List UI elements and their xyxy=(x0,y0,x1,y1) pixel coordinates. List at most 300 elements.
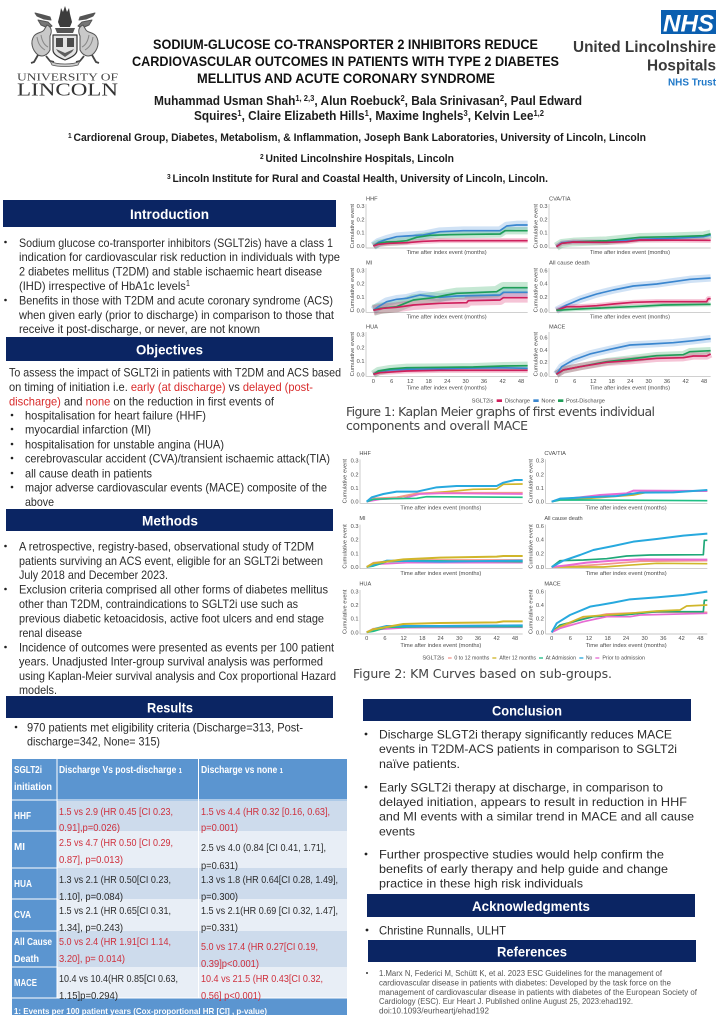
wordmark line 2: LINCOLN xyxy=(17,80,118,100)
text: methods bullets: using Kaplan-Meier survival analysis and Cox proportional Hazard xyxy=(19,669,336,683)
text: objectives: above xyxy=(25,495,54,509)
text: methods bullets: Exclusion criteria comprised all other forms of diabetes mellitus xyxy=(19,582,328,596)
chart: MACE: 0 xyxy=(555,379,558,385)
row: MI: 0.87], p=0.013) xyxy=(59,855,123,866)
helmet and tower xyxy=(58,6,72,27)
text: objectives: myocardial infarction (MI) xyxy=(25,422,151,436)
chart: HUA sub-groups: 42 xyxy=(494,636,500,642)
chart: HHF sub-groups: Cumulative event xyxy=(343,459,349,503)
chart: CVA/TIA: 0.2 xyxy=(540,217,548,223)
authors: 2 xyxy=(400,94,405,103)
text: reference list xyxy=(366,969,698,1016)
text: conclusion bullets xyxy=(365,728,694,890)
chart: MACE: 48 xyxy=(701,379,707,385)
row: HHF: 1.5 vs 2.9 (HR 0.45 [CI 0.23, xyxy=(59,807,173,818)
text: introduction bullets: (IHD) irrespective of HbA1c levels xyxy=(19,279,199,293)
row: MACE: 10.4 vs 21.5 (HR 0.43[CI 0.32, xyxy=(201,974,323,985)
heading: Methods: Methods xyxy=(142,512,198,528)
chart: MACE sub-groups: 0 xyxy=(550,636,553,642)
row: HUA: 1.10], p=0.084) xyxy=(59,892,123,903)
chart: CVA/TIA xyxy=(533,197,711,256)
heading: Objectives: Objectives xyxy=(136,342,203,358)
row: CVA: CVA xyxy=(14,910,31,921)
text: objectives: To assess the impact of SGLT2i in patients with T2DM and ACS based xyxy=(9,366,341,380)
chart: all cause death: 0.6 xyxy=(540,268,548,274)
chart: CVA/TIA: 0.1 xyxy=(540,231,548,237)
chart: MI sub-groups: 0.3 xyxy=(351,524,359,530)
chart: HUA: 0.0 xyxy=(357,372,365,378)
text: introduction bullets: when given early (prior to discharge) in comparison to those that xyxy=(18,308,335,322)
chart: CVA/TIA sub-groups xyxy=(528,451,707,512)
row: HHF: p=0.001) xyxy=(201,823,238,834)
chart: CVA/TIA sub-groups: 0.2 xyxy=(536,472,544,478)
text: methods bullets: renal disease xyxy=(19,626,82,640)
table header: Discharge vs none 1 xyxy=(201,765,283,776)
chart: all cause death xyxy=(533,261,711,320)
text: methods bullets: models. xyxy=(19,683,57,697)
text: objectives xyxy=(9,366,341,509)
text: objectives: major adverse cardiovascular events (MACE) composite of the xyxy=(25,480,327,494)
chart: MACE sub-groups: 6 xyxy=(569,636,572,642)
text: introduction bullets: Benefits in those with T2DM and acute coronary syndrome (ACS) xyxy=(19,294,333,308)
chart: MACE xyxy=(533,325,711,391)
row: MI xyxy=(14,838,326,872)
row: CVA xyxy=(14,906,338,934)
caption: figure 1: Figure 1: Kaplan Meier graphs of first events individual xyxy=(346,404,655,419)
row: HUA: HUA xyxy=(14,879,32,890)
heading: Conclusion xyxy=(363,699,691,721)
authors: , Alun Roebuck xyxy=(314,94,400,108)
row: HHF: HHF xyxy=(14,811,31,822)
text: objectives: hospitalisation for heart failure (HHF) xyxy=(25,408,206,422)
chart: HUA: 0 xyxy=(372,379,375,385)
chart: HUA: 0.1 xyxy=(357,359,365,365)
legend: figure 1: None xyxy=(541,398,555,404)
chart: HUA sub-groups: Cumulative event xyxy=(343,589,349,634)
chart: MACE: Cumulative event xyxy=(533,332,539,376)
chart: HHF: Time after index event (months) xyxy=(407,250,487,256)
chart: HUA sub-groups: HUA xyxy=(359,581,372,587)
chart: MACE: 0.2 xyxy=(540,360,548,366)
text: conclusion bullets: and MI events with a similar trend in MACE and all cause xyxy=(379,810,694,824)
chart: HHF sub-groups: Time after index event (months) xyxy=(400,506,481,512)
chart: MACE: 18 xyxy=(609,379,615,385)
chart: CVA/TIA sub-groups: CVA/TIA xyxy=(544,451,566,457)
chart: all cause death: 0.2 xyxy=(540,295,548,301)
chart: CVA/TIA sub-groups: Time after index event (months) xyxy=(586,506,667,512)
chart: HHF: 0.2 xyxy=(357,217,365,223)
heading: References xyxy=(368,940,696,962)
chart: MACE sub-groups: Time after index event (months) xyxy=(586,643,667,649)
row: HHF: 0.91],p=0.026) xyxy=(59,823,120,834)
chart: all cause death sub-groups: All cause death xyxy=(544,516,583,522)
authors xyxy=(154,94,582,123)
authors: 2 xyxy=(500,94,505,103)
chart: CVA/TIA: 0.0 xyxy=(540,244,548,250)
panel: references xyxy=(366,940,698,1016)
chart: HHF: 0.3 xyxy=(357,204,365,210)
row: HUA: 1.3 vs 2.1 (HR 0.50[CI 0.23, xyxy=(59,875,171,886)
chart: MI sub-groups: MI xyxy=(359,516,366,522)
chart: MACE sub-groups: 12 xyxy=(586,636,592,642)
chart: MACE: 36 xyxy=(664,379,670,385)
figure 2: sub-group KM charts xyxy=(343,451,707,662)
chart: all cause death sub-groups xyxy=(528,516,707,577)
text: eligibility: discharge=342, None= 315) xyxy=(27,734,160,748)
legend: figure 1: Discharge xyxy=(505,398,530,404)
panel: results xyxy=(6,696,347,1016)
text: conclusion bullets: events xyxy=(379,824,415,838)
chart: MI: MI xyxy=(366,261,373,267)
motto scroll xyxy=(50,61,80,66)
chart: HUA sub-groups: 18 xyxy=(419,636,425,642)
authors: 1 xyxy=(365,109,369,118)
chart: CVA/TIA sub-groups: Cumulative event xyxy=(528,459,534,503)
chart: CVA/TIA: Time after index event (months) xyxy=(590,250,670,256)
legend: figure 2: 0 to 12 months xyxy=(454,656,489,662)
affiliations: 3 xyxy=(167,174,172,181)
chart: CVA/TIA sub-groups: 0.1 xyxy=(536,486,544,492)
row: HHF xyxy=(14,807,330,834)
legend: figure 1 xyxy=(472,398,605,404)
text: introduction bullets: 1 xyxy=(186,279,191,288)
text: methods bullets: previous diabetic ketoacidosis, active foot ulcers and end stage xyxy=(19,612,324,626)
text: acknowledgment: Christine Runnalls, ULHT xyxy=(379,924,507,938)
chart: all cause death sub-groups: Time after index event (months) xyxy=(586,571,667,577)
heading: Acknowledgments: Acknowledgments xyxy=(472,898,590,914)
table header: initiation xyxy=(14,782,52,793)
text: objectives: hospitalisation for unstable angina (HUA) xyxy=(25,438,224,452)
chart: MACE sub-groups xyxy=(528,581,707,649)
row: All Cause Death: All Cause xyxy=(14,937,52,948)
affiliations: 2 xyxy=(260,154,265,161)
heading: Introduction: Introduction xyxy=(130,206,209,222)
authors: Muhammad Usman Shah xyxy=(154,94,303,108)
authors: , Paul Edward xyxy=(504,94,582,108)
chart: HUA sub-groups: 0.1 xyxy=(351,617,359,623)
table header xyxy=(14,765,283,793)
chart: MI sub-groups: 0.1 xyxy=(351,551,359,557)
text: conclusion bullets: Further prospective studies would help confirm the xyxy=(379,848,664,862)
heading: Objectives xyxy=(6,337,333,361)
authors: , Kelvin Lee xyxy=(468,109,534,123)
text: objectives: all cause death in patients xyxy=(25,466,152,480)
panel: methods xyxy=(4,509,336,697)
title xyxy=(132,37,559,86)
chart: HUA sub-groups: 12 xyxy=(401,636,407,642)
text: objectives: cerebrovascular accident (CVA)/transient ischaemic attack(TIA) xyxy=(25,452,330,466)
text: reference list: cardiovascular disease in patients with diabetes: Developed by the task force on the xyxy=(379,978,672,988)
chart: all cause death sub-groups: 0.0 xyxy=(536,565,544,571)
chart: MACE sub-groups: Cumulative event xyxy=(528,589,534,634)
chart: all cause death: Time after index event (months) xyxy=(590,314,670,320)
logo: NHS United Lincolnshire Hospitals xyxy=(573,10,717,88)
chart: HUA: 0.2 xyxy=(357,346,365,352)
row: All Cause Death: 0.39]p<0.001) xyxy=(201,959,259,970)
figure 1: Kaplan Meier charts xyxy=(350,197,711,404)
chart: MACE: 6 xyxy=(573,379,576,385)
row: All Cause Death: 5.0 vs 2.4 (HR 1.91[CI 1.14, xyxy=(59,937,171,948)
chart: MACE sub-groups: MACE xyxy=(544,581,561,587)
authors: , Claire Elizabeth Hills xyxy=(242,109,365,123)
chart: HUA: 12 xyxy=(407,379,413,385)
row: All Cause Death xyxy=(14,937,318,970)
legend: figure 2 xyxy=(422,656,645,662)
chart: MACE sub-groups: 0.4 xyxy=(536,603,544,609)
text: methods bullets: July 2018 and December 2023. xyxy=(19,568,168,582)
text: methods bullets: A retrospective, registry-based, observational study of T2DM xyxy=(19,540,314,554)
authors: 1,2 xyxy=(533,109,545,118)
chart: MI sub-groups: 0.2 xyxy=(351,538,359,544)
chart: MACE sub-groups: 0.2 xyxy=(536,617,544,623)
trust name line 2: Hospitals xyxy=(647,58,716,74)
panel: conclusion xyxy=(363,699,694,890)
row: MACE: 10.4 vs 10.4(HR 0.85[CI 0.63, xyxy=(59,974,178,985)
text: reference list: doi:10.1093/eurheartj/ehad192 xyxy=(379,1006,490,1016)
chart: HUA sub-groups: 48 xyxy=(512,636,518,642)
chart: MACE: 0.4 xyxy=(540,348,548,354)
griffin right xyxy=(76,13,99,63)
chart: all cause death: 0.0 xyxy=(540,308,548,314)
chart: all cause death: All cause death xyxy=(549,261,590,267)
legend: figure 2: At Admission xyxy=(546,656,576,662)
text: conclusion bullets: naïve patients. xyxy=(379,757,460,771)
logo: University of Lincoln xyxy=(17,6,118,100)
chart: MI xyxy=(350,261,528,320)
heading: References: References xyxy=(497,944,567,960)
shield xyxy=(53,35,77,60)
heading: Methods xyxy=(6,509,333,531)
caption: figure 1 xyxy=(346,404,655,433)
chart: HUA: 30 xyxy=(463,379,469,385)
chart: HUA: 42 xyxy=(500,379,506,385)
affiliations: Cardiorenal Group, Diabetes, Metabolism, & Inflammation, Joseph Bank Laboratories, University of Lincoln, Lincoln xyxy=(74,132,646,144)
chart: MACE: 0.6 xyxy=(540,336,548,342)
text: conclusion bullets: delayed initiation, appears to result in reduction in HHF xyxy=(379,795,687,809)
affiliations xyxy=(68,132,646,185)
chart: MACE sub-groups: 0.6 xyxy=(536,589,544,595)
text: methods bullets: Incidence of outcomes were presented as events per 100 patient xyxy=(19,640,335,654)
chart: HUA sub-groups: 0.2 xyxy=(351,603,359,609)
chart: MACE: MACE xyxy=(549,325,566,331)
panel: objectives xyxy=(6,337,341,509)
chart: HUA: 6 xyxy=(390,379,393,385)
chart: HUA: 36 xyxy=(481,379,487,385)
chart: MACE sub-groups: 48 xyxy=(697,636,703,642)
text: conclusion bullets: Early SGLT2i therapy at discharge, in comparison to xyxy=(379,780,663,794)
row: All Cause Death: 3.20], p= 0.014) xyxy=(59,954,125,965)
row: MACE: 1.15]p=0.294) xyxy=(59,991,118,1002)
chart: HHF: 0.0 xyxy=(357,244,365,250)
row: MI: 2.5 vs 4.0 (0.84 [CI 0.41, 1.71], xyxy=(201,843,326,854)
chart: all cause death sub-groups: 0.2 xyxy=(536,551,544,557)
heading: Introduction xyxy=(3,200,336,227)
trust name line 1: United Lincolnshire xyxy=(573,39,716,56)
chart: CVA/TIA: CVA/TIA xyxy=(549,197,571,203)
chart: MI: 0.3 xyxy=(357,268,365,274)
text: methods bullets xyxy=(4,540,336,697)
text: introduction bullets: 2 diabetes mellitus (T2DM) and stable ischaemic heart disease xyxy=(19,264,322,278)
row: HHF: 1.5 vs 4.4 (HR 0.32 [0.16, 0.63], xyxy=(201,807,330,818)
chart: HHF: Cumulative event xyxy=(350,204,356,248)
caption: figure 1: components and overall MACE xyxy=(346,418,528,433)
text: introduction bullets: indication for cardiovascular risk reduction in individuals with type xyxy=(19,250,340,264)
chart: HHF sub-groups: 0.1 xyxy=(351,486,359,492)
heading: Results: Results xyxy=(147,700,193,716)
chart: MACE: Time after index event (months) xyxy=(590,385,670,391)
row: CVA: 1.5 vs 2.1 (HR 0.65[CI 0.31, xyxy=(59,906,171,917)
chart: HUA sub-groups: 24 xyxy=(438,636,444,642)
chart: MACE sub-groups: 42 xyxy=(679,636,685,642)
row: MACE xyxy=(14,974,323,1002)
row: All Cause Death: Death xyxy=(14,954,39,965)
authors: 1, 2,3 xyxy=(295,94,315,103)
authors: 3 xyxy=(463,109,468,118)
text: reference list: management of cardiovascular disease in patients with diabetes of the European Society of xyxy=(379,988,698,997)
chart: MACE sub-groups: 18 xyxy=(605,636,611,642)
chart: MACE sub-groups: 24 xyxy=(623,636,629,642)
authors: , Maxime Inghels xyxy=(369,109,464,123)
chart: HUA: 24 xyxy=(444,379,450,385)
row: MI: 2.5 vs 4.7 (HR 0.50 [CI 0.29, xyxy=(59,838,173,849)
text: introduction bullets: receive it post-discharge, or never, are not known xyxy=(19,322,260,336)
text: conclusion bullets: events in T2DM-ACS patients in comparison to SGLT2i xyxy=(379,742,677,756)
caption: figure 2: Figure 2: KM Curves based on sub-groups. xyxy=(353,666,612,681)
chart: HUA sub-groups: 0.3 xyxy=(351,589,359,595)
chart: HUA: Time after index event (months) xyxy=(407,385,487,391)
icon: NHS badge: NHS xyxy=(663,10,714,38)
chart: MACE sub-groups: 36 xyxy=(660,636,666,642)
legend: figure 2: Prior to admission xyxy=(602,656,645,662)
legend: figure 2: SGLT2is xyxy=(422,656,444,662)
chart: MACE: 12 xyxy=(590,379,596,385)
chart: HHF xyxy=(350,197,528,256)
row: CVA: p=0.331) xyxy=(201,923,238,934)
chart: MACE: 24 xyxy=(627,379,633,385)
row: MACE: 0.56] p<0.001) xyxy=(201,991,261,1002)
text: eligibility: 970 patients met eligibility criteria (Discharge=313, Post- xyxy=(27,720,303,734)
text: reference list: 1.Marx N, Federici M, Schütt K, et al. 2023 ESC Guidelines for the management of xyxy=(379,969,663,978)
legend: figure 1: SGLT2is xyxy=(472,398,493,404)
chart: MI: Cumulative event xyxy=(350,268,356,312)
chart: all cause death sub-groups: 0.4 xyxy=(536,538,544,544)
chart: CVA/TIA sub-groups: 0.3 xyxy=(536,459,544,465)
chart: MACE sub-groups: 30 xyxy=(642,636,648,642)
trust name line 3: NHS Trust xyxy=(668,78,717,88)
chart: MI sub-groups: 0.0 xyxy=(351,565,359,571)
heading: Acknowledgments xyxy=(367,894,695,917)
chart: MI: 0.0 xyxy=(357,308,365,314)
panel: introduction xyxy=(3,200,340,336)
chart: MACE: 30 xyxy=(646,379,652,385)
chart: HUA: 48 xyxy=(518,379,524,385)
authors: 1 xyxy=(237,109,242,118)
chart: HHF: HHF xyxy=(366,197,378,203)
heading: Results xyxy=(6,696,333,718)
chart: HUA sub-groups: 30 xyxy=(456,636,462,642)
title: CARDIOVASCULAR OUTCOMES IN PATIENTS WITH TYPE 2 DIABETES xyxy=(132,54,559,69)
authors: Squires xyxy=(194,109,240,123)
chart: HUA xyxy=(350,325,528,391)
chart: HUA: 18 xyxy=(426,379,432,385)
affiliations: 1 xyxy=(68,133,74,140)
chart: HHF sub-groups: HHF xyxy=(359,451,372,457)
wordmark line 1: UNIVERSITY OF xyxy=(17,72,118,84)
chart: all cause death sub-groups: 0.6 xyxy=(536,524,544,530)
chart: HUA: HUA xyxy=(366,325,378,331)
text: conclusion bullets: benefits of early therapy and help guide and change xyxy=(379,862,668,876)
chart: MI: Time after index event (months) xyxy=(407,314,487,320)
text: objectives: on timing of initiation i.e. early (at discharge) vs delayed (post- xyxy=(9,380,313,394)
chart: HUA sub-groups: 6 xyxy=(383,636,387,642)
row: CVA: 1.34], p=0.243) xyxy=(59,923,123,934)
chart: CVA/TIA: 0.3 xyxy=(540,204,548,210)
affiliations: United Lincolnshire Hospitals, Lincoln xyxy=(265,153,454,165)
griffin left xyxy=(31,13,54,63)
table header: Discharge Vs post-discharge 1 xyxy=(59,765,182,776)
text: introduction bullets: Sodium glucose co-transporter inhibitors (SGLT2is) have a class 1 xyxy=(19,236,333,250)
chart: HUA: Cumulative event xyxy=(350,332,356,376)
row: HUA xyxy=(14,875,338,903)
chart: MACE: 0.0 xyxy=(540,372,548,378)
text: introduction bullets xyxy=(4,236,340,336)
chart: HHF sub-groups: 0.0 xyxy=(351,500,359,506)
chart: CVA/TIA: Cumulative event xyxy=(533,204,539,248)
chart: HHF sub-groups: 0.2 xyxy=(351,472,359,478)
chart: all cause death: Cumulative event xyxy=(533,268,539,312)
text: reference list: Cardiology (ESC). Eur Heart J. Published online August 25, 2023:ehad192. xyxy=(379,997,633,1006)
panel: acknowledgments xyxy=(366,894,695,938)
row: CVA: 1.5 vs 2.1(HR 0.69 [CI 0.32, 1.47], xyxy=(201,906,338,917)
chart: MI sub-groups: Cumulative event xyxy=(343,524,349,569)
chart: HUA sub-groups: Time after index event (months) xyxy=(400,643,481,649)
table header: SGLT2i xyxy=(14,765,42,776)
chart: MI: 0.1 xyxy=(357,295,365,301)
chart: all cause death sub-groups: Cumulative event xyxy=(528,524,534,569)
text: eligibility xyxy=(15,720,303,748)
chart: HHF sub-groups: 0.3 xyxy=(351,459,359,465)
authors: , Bala Srinivasan xyxy=(405,94,500,108)
chart: MACE: 42 xyxy=(683,379,689,385)
chart: HUA sub-groups xyxy=(343,581,523,649)
chart: all cause death: 0.4 xyxy=(540,282,548,288)
heading: Conclusion: Conclusion xyxy=(492,702,562,718)
row: All Cause Death: 5.0 vs 17.4 (HR 0.27[CI 0.19, xyxy=(201,942,318,953)
title: MELLITUS AND ACUTE CORONARY SYNDROME xyxy=(197,71,495,86)
text: conclusion bullets: practice in these high risk individuals xyxy=(379,876,583,890)
icon: heraldic crest xyxy=(31,6,99,66)
chart: HUA: 0.3 xyxy=(357,332,365,338)
row: HUA: 1.3 vs 1.8 (HR 0.64[CI 0.28, 1.49], xyxy=(201,875,338,886)
chart: HUA sub-groups: 0.0 xyxy=(351,630,359,636)
row: HUA: p=0.300) xyxy=(201,892,238,903)
legend: figure 2: After 12 months xyxy=(499,656,536,662)
text: methods bullets: years. Unadjusted Inter-group survival analysis was performed xyxy=(19,654,323,668)
text: methods bullets: patients surviving an ACS event, eligible for an SGLT2i between xyxy=(19,554,323,568)
chart: HHF: 0.1 xyxy=(357,231,365,237)
chart: MI sub-groups xyxy=(343,516,523,577)
results table xyxy=(12,759,347,1016)
legend: figure 1: Post-Discharge xyxy=(566,398,605,404)
text: methods bullets: other than T2DM, contraindications to SGLT2i use such as xyxy=(19,597,298,611)
legend: figure 2: No xyxy=(586,656,592,662)
text: objectives: discharge) and none on the reduction in first events of xyxy=(9,394,275,408)
text: conclusion bullets: Discharge SLGT2i therapy significantly reduces MACE xyxy=(379,728,672,742)
row: MI: p=0.631) xyxy=(201,861,238,872)
chart: MI: 0.2 xyxy=(357,282,365,288)
row: MI: MI xyxy=(14,842,25,853)
chart: MACE sub-groups: 0.0 xyxy=(536,630,544,636)
